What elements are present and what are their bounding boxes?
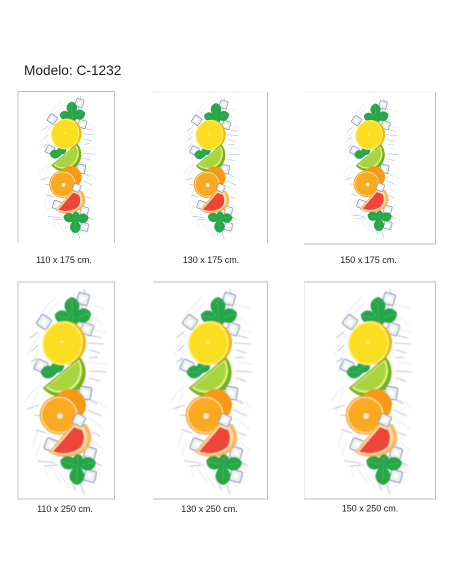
panel: 130 x 250: 130 x 250 cm.	[181, 504, 238, 514]
panel: 130 x 250	[153, 282, 268, 514]
panel: 130 x 175	[153, 92, 268, 265]
panel: 110 x 250: 110 x 250 cm.	[37, 504, 93, 514]
panel: 150 x 250: 150 x 250 cm.	[342, 504, 398, 514]
panel: 150 x 175	[304, 92, 436, 265]
panel: 150 x 250	[304, 282, 436, 514]
panel: 150 x 175: 150 x 175 cm.	[340, 255, 397, 265]
panel: 110 x 175	[18, 92, 114, 265]
title: Modelo: C-1232	[24, 63, 121, 78]
panel: 110 x 175: 110 x 175 cm.	[36, 255, 92, 265]
panel: 110 x 250	[18, 282, 114, 514]
panel: 130 x 175: 130 x 175 cm.	[183, 255, 239, 265]
